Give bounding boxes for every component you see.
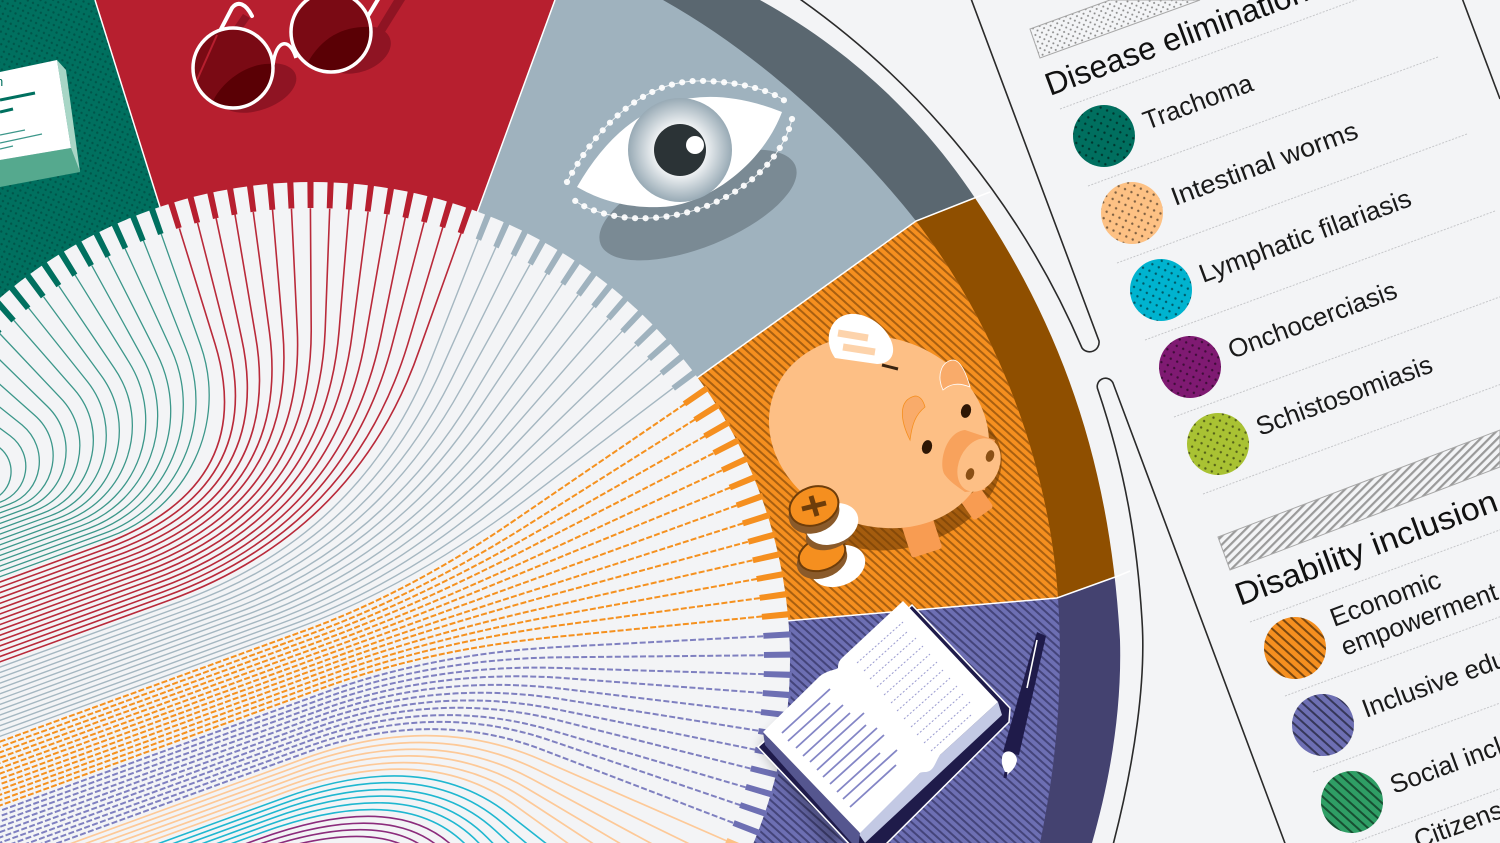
legend item: Economic empowerment: Economic [1326, 564, 1445, 633]
icon: document card [0, 60, 80, 187]
lines: trachoma group teal [0, 234, 252, 640]
ticks: light orange [0, 48, 924, 843]
ticks: green [0, 14, 958, 843]
icon: eye [567, 81, 811, 283]
lines: purple dashed group [0, 545, 820, 843]
lines: orange dashed group [0, 399, 775, 843]
legend item: Onchocerciasis: Onchocerciasis [1224, 275, 1401, 365]
legend panel outline [797, 0, 1500, 843]
chart: flowing lines from wheel ticks [0, 81, 889, 843]
legend item: Lymphatic filariasis [1130, 183, 1415, 321]
legend item: Intestinal worms [1101, 115, 1362, 244]
icon: round glasses [193, 0, 405, 122]
panel: orange economic empowerment sector [698, 198, 1115, 620]
panel: green trachoma sector [0, 0, 160, 298]
ticks: grey [0, 57, 915, 843]
ticks: red [0, 75, 897, 843]
lines: red group [0, 138, 545, 715]
legend header bar: dotted [1030, 0, 1200, 58]
panel: red sector [96, 0, 554, 212]
legend dotted dividers [1060, 0, 1500, 843]
legend item: Lymphatic filariasis: Lymphatic filariasis [1195, 183, 1415, 289]
coin stack [783, 480, 871, 594]
legend item: Economic empowerment: empowerment [1337, 576, 1500, 662]
legend item: Schistosomiasis: Schistosomiasis [1252, 349, 1437, 442]
icon: piggy bank with coins [742, 305, 1022, 594]
legend item: Trachoma [1073, 67, 1257, 167]
panel: purple inclusive education sector [754, 578, 1120, 843]
legend item: Economic empowerment [1264, 564, 1500, 679]
legend item: Trachoma: Trachoma [1139, 67, 1257, 136]
ticks: purple [0, 167, 805, 843]
lines: grey group [0, 195, 706, 781]
legend item: Intestinal worms: Intestinal worms [1167, 115, 1362, 212]
icon: pen [1002, 632, 1046, 778]
coin in slot [829, 314, 893, 364]
lines: cyan group [0, 691, 682, 843]
lines: light orange group [0, 632, 748, 843]
lines: magenta group [0, 755, 591, 843]
inner wheel disc [0, 182, 790, 843]
heading: Disability inclusion: Disability inclusion [1230, 483, 1500, 613]
legend item: Social inclusion [1321, 709, 1500, 833]
legend item: Inclusive education [1292, 619, 1500, 756]
ticks: orange [0, 11, 961, 843]
legend item: Schistosomiasis [1187, 349, 1437, 475]
ticks around the wheel [0, 11, 961, 843]
panel: grey eye sector [478, 0, 974, 377]
legend header bar: hatched [1218, 430, 1500, 570]
legend item: Onchocerciasis [1159, 275, 1401, 398]
icon: open book [758, 601, 1010, 843]
